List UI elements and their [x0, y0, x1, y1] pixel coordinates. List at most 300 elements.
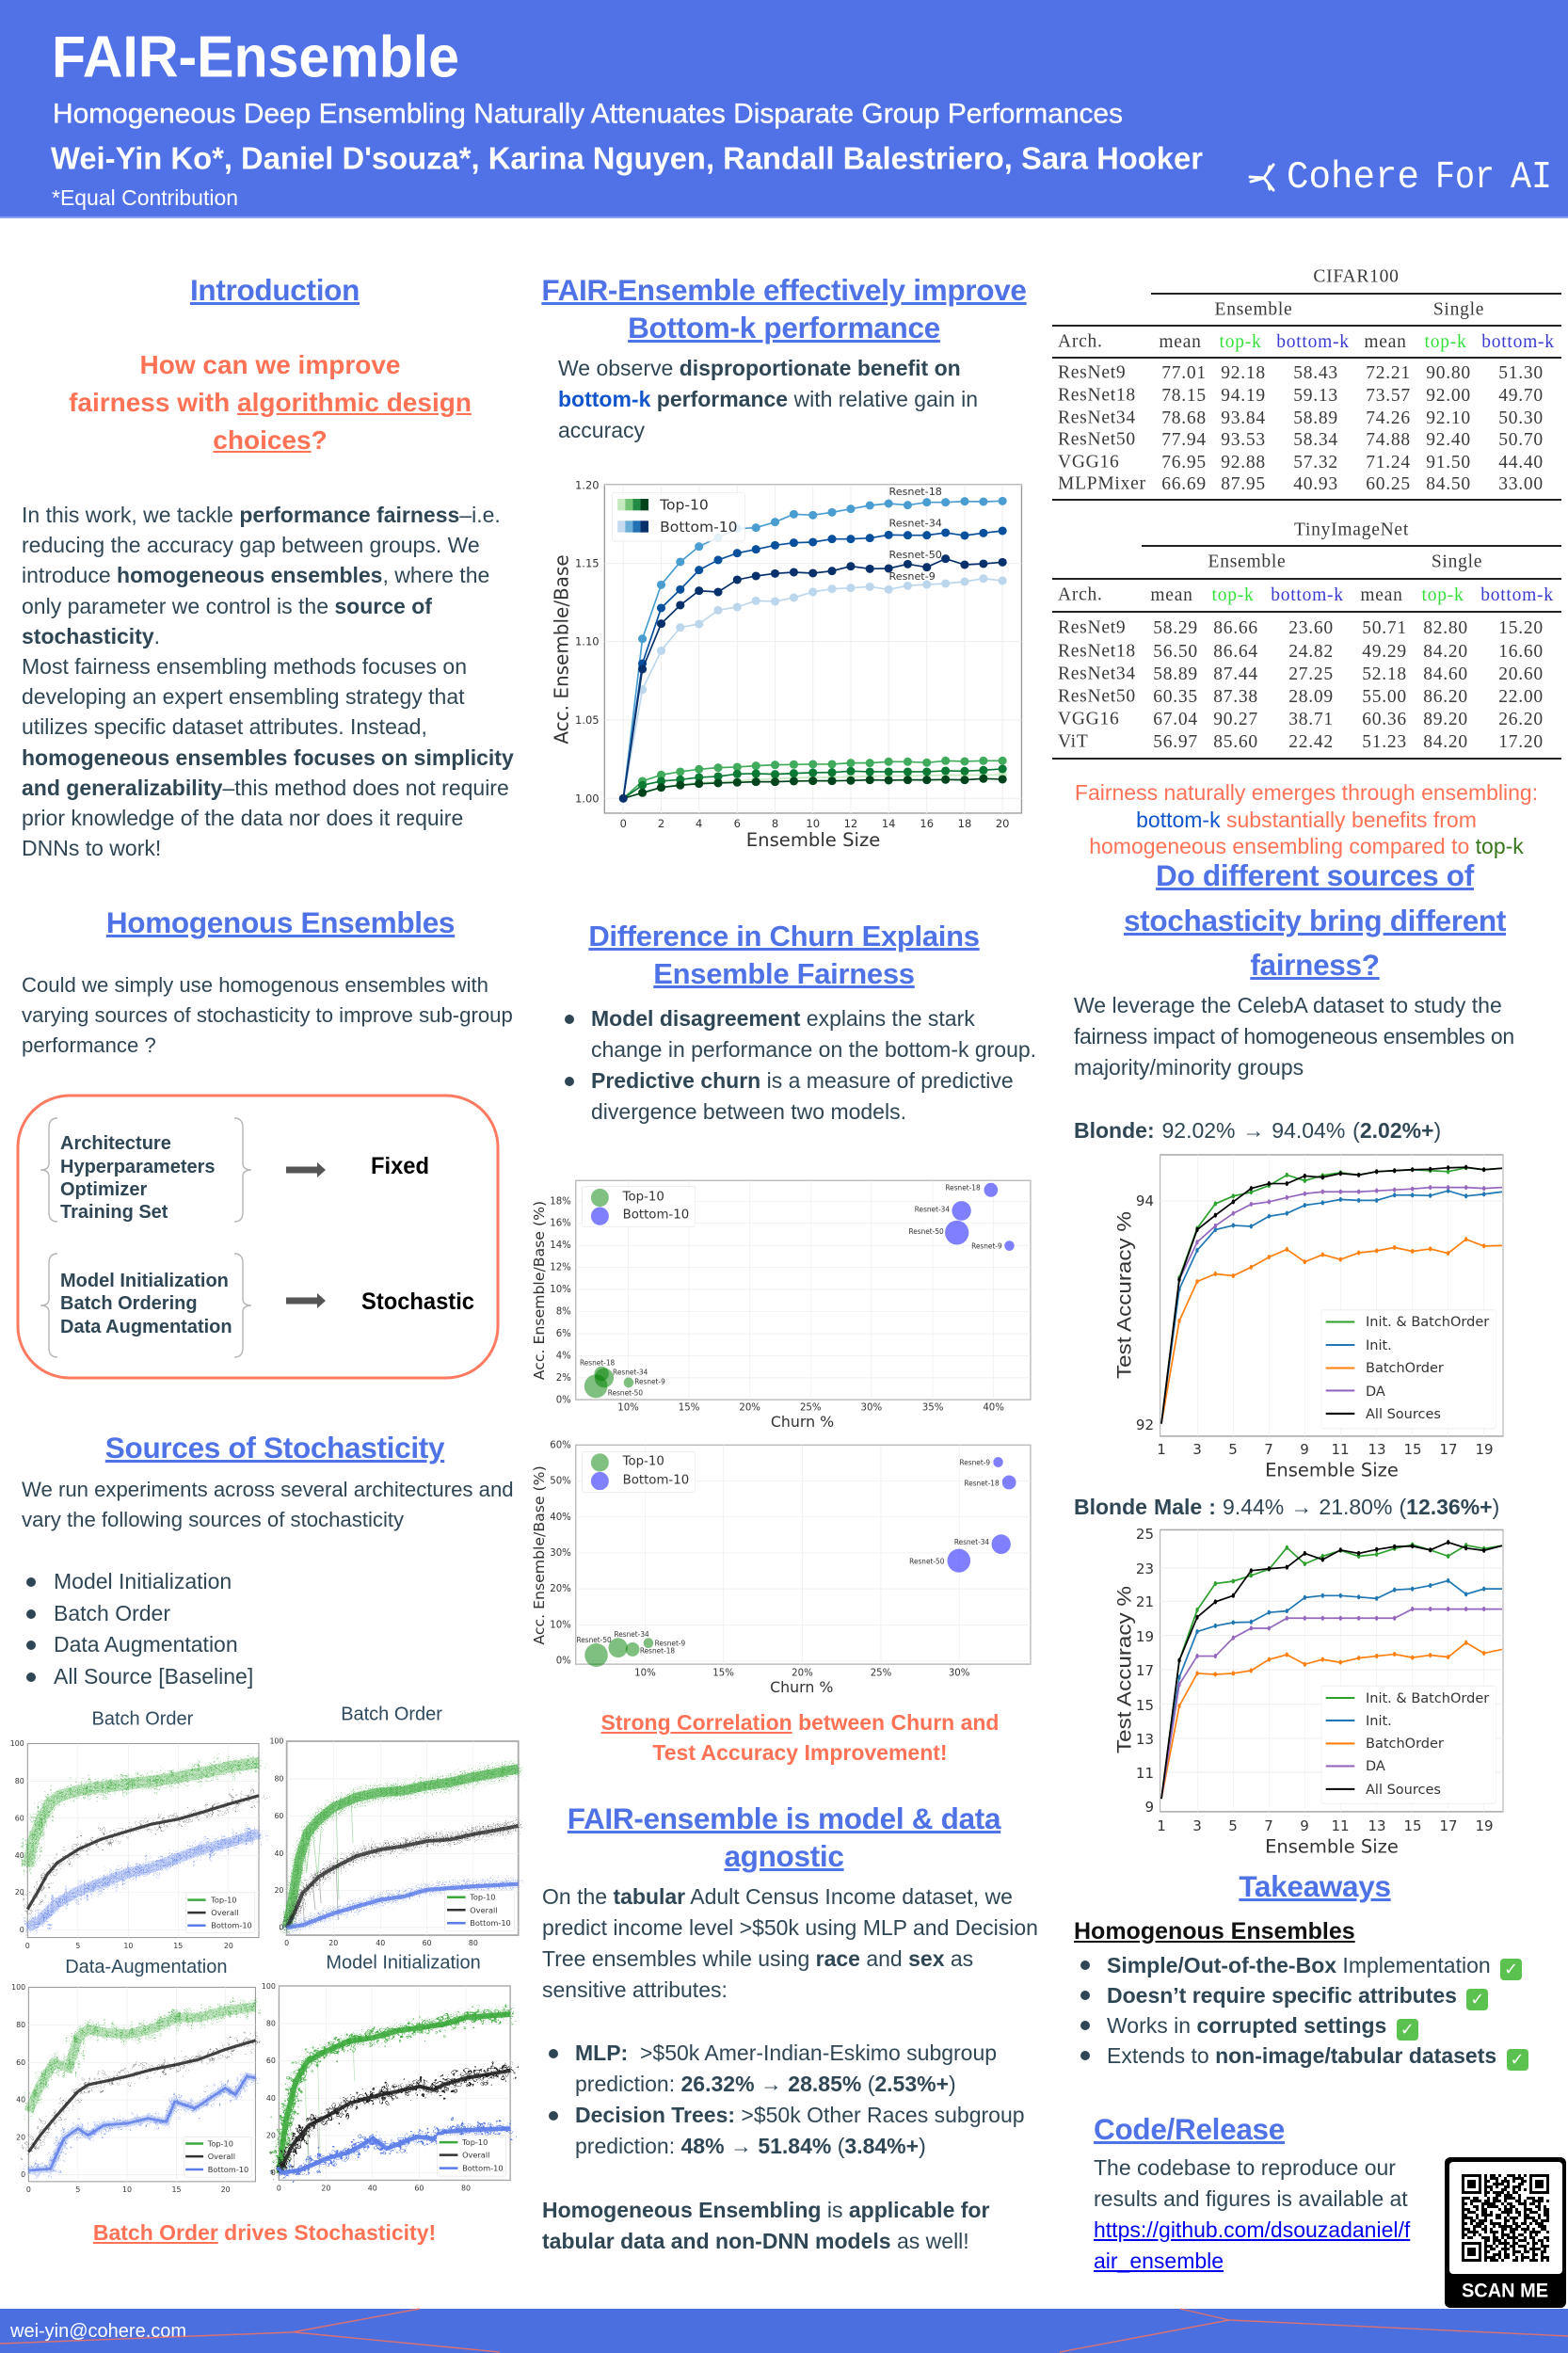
axis tick labels: 2 — [658, 817, 664, 830]
scatter plot: churn vs gain (cifar100): 8% — [556, 1305, 571, 1318]
introduction paragraph: homogeneous ensembles focuses on simplicity — [22, 745, 514, 770]
heading: sources of stochasticity: Sources of Stochasticity — [105, 1431, 444, 1465]
sources bullet list: Model Initialization — [54, 1569, 232, 1593]
table: tinyimagenet: 84.20 — [1423, 642, 1468, 661]
table: cifar100: ResNet50 — [1058, 429, 1136, 450]
poster title: FAIR-Ensemble — [52, 24, 459, 90]
fixed label: Fixed — [371, 1153, 429, 1179]
arrow to fixed — [286, 1162, 326, 1177]
table: cifar100: ResNet34 — [1058, 408, 1136, 427]
table: cifar100: ResNet9 — [1058, 363, 1126, 382]
scatter plot: churn vs gain (tinyimagenet): 10% — [634, 1667, 656, 1678]
axis tick labels: 6 — [734, 817, 741, 830]
series labels: Resnet-18 — [889, 486, 942, 498]
chart: model initialization: 0 — [271, 2169, 276, 2177]
table: cifar100: 66.69 — [1161, 474, 1207, 493]
table: tinyimagenet: 50.71 — [1362, 617, 1407, 638]
table: cifar100: 49.70 — [1498, 386, 1544, 405]
introduction paragraph: introduce homogeneous ensembles, where the — [22, 563, 489, 587]
legend: Bottom-10 — [462, 2164, 504, 2173]
scatter plot: churn vs gain (tinyimagenet): Acc. Ensemble/Base (%) — [531, 1465, 548, 1645]
table: tinyimagenet: 22.00 — [1498, 687, 1544, 706]
axis tick labels: 1.00 — [575, 792, 600, 805]
table: cifar100: 72.21 — [1366, 363, 1411, 382]
scatter plot: churn vs gain (cifar100): Resnet-50 — [908, 1227, 944, 1236]
table: cifar100: 90.80 — [1426, 363, 1471, 382]
line chart: blonde male test accuracy: 19 — [1475, 1817, 1494, 1834]
table: cifar100: 92.18 — [1221, 363, 1266, 382]
table: cifar100: 77.01 — [1161, 363, 1207, 382]
table: tinyimagenet: 60.36 — [1362, 710, 1407, 728]
takeaways subheading: Homogenous Ensembles — [1074, 1918, 1355, 1945]
homogenous ensembles paragraph: varying sources of stochasticity to improve sub-group — [22, 1003, 513, 1027]
introduction paragraph: and generalizability–this method does not require — [22, 776, 509, 800]
tabular results bullets: Decision Trees: >$50k Other Races subgroup — [575, 2103, 1025, 2127]
tabular results bullets: prediction: 48% → 51.84% (3.84%+) — [575, 2134, 926, 2158]
line chart: blonde male test accuracy: 5 — [1228, 1817, 1238, 1834]
legend: Top-10 — [207, 2138, 233, 2148]
heading: model and data agnostic: FAIR-ensemble is model & data — [568, 1801, 1000, 1835]
legend — [437, 2136, 505, 2176]
table: cifar100: 58.89 — [1293, 408, 1338, 427]
takeaways bullet list: ✓ — [1510, 2050, 1525, 2070]
scatter plot: churn vs gain (cifar100): 0% — [556, 1394, 571, 1406]
brace group: stochastic factors — [40, 1254, 251, 1357]
legend: Top-10 — [469, 1893, 496, 1902]
introduction paragraph: developing an expert ensembling strategy that — [22, 684, 465, 709]
scatter plot: churn vs gain (tinyimagenet): Resnet-9 — [655, 1639, 685, 1648]
table: cifar100: CIFAR100 — [1313, 267, 1400, 286]
chart: batch order (right): 80 — [274, 1774, 283, 1783]
line chart: blonde test accuracy: Init. & BatchOrder — [1366, 1315, 1489, 1330]
table: cifar100: 74.26 — [1366, 408, 1411, 427]
table: tinyimagenet — [1052, 520, 1561, 759]
chart: model initialization: 40 — [368, 2184, 377, 2192]
scatter plot: churn vs gain (cifar100): Resnet-34 — [915, 1205, 950, 1214]
line chart: blonde test accuracy: 1 — [1157, 1441, 1166, 1458]
line chart: blonde male test accuracy: 13 — [1368, 1817, 1386, 1834]
sources paragraph: vary the following sources of stochasticity — [22, 1508, 404, 1531]
scatter plot: churn vs gain (tinyimagenet): 20% — [792, 1667, 813, 1678]
heading: sources bring different fairness: Do different sources of — [1156, 858, 1474, 892]
scatter plot: churn vs gain (cifar100): 12% — [550, 1261, 571, 1273]
table: tinyimagenet: 58.29 — [1153, 617, 1198, 638]
celeba paragraph: fairness impact of homogeneous ensembles on — [1074, 1024, 1514, 1048]
brace group: fixed factors — [40, 1118, 251, 1222]
line chart: blonde male test accuracy: Ensemble Size — [1265, 1835, 1399, 1858]
line chart: blonde test accuracy: Ensemble Size — [1265, 1459, 1399, 1481]
heading: difference in churn: Ensemble Fairness — [653, 957, 915, 990]
chart: model initialization: 80 — [266, 2019, 276, 2027]
legend: Bottom-10 — [470, 1918, 511, 1928]
scatter plot: churn vs gain (tinyimagenet): 50% — [550, 1475, 571, 1487]
axis tick labels: 10 — [806, 817, 820, 830]
line chart: blonde male test accuracy: 25 — [1136, 1526, 1154, 1543]
line chart: blonde male test accuracy: 9 — [1300, 1817, 1309, 1834]
scatter plot: churn vs gain (tinyimagenet): 40% — [550, 1512, 571, 1523]
scatter plot: churn vs gain (cifar100): Resnet-18 — [945, 1183, 981, 1192]
bottom-k paragraph — [558, 356, 978, 442]
table: cifar100: 91.50 — [1426, 452, 1471, 472]
line chart: blonde test accuracy: All Sources — [1366, 1407, 1441, 1422]
legend: Overall — [208, 2152, 235, 2161]
heading: code release: Code/Release — [1094, 2112, 1285, 2146]
table: tinyimagenet: ViT — [1058, 732, 1088, 751]
cohere for ai wordmark: Cohere — [1287, 156, 1419, 200]
chart: batch order (right): 20 — [274, 1886, 283, 1895]
line chart: blonde male test accuracy: Init. — [1366, 1714, 1392, 1729]
table: tinyimagenet: 26.20 — [1498, 710, 1544, 728]
table: cifar100: 59.13 — [1293, 386, 1338, 405]
cohere for ai wordmark — [1287, 156, 1552, 200]
line chart: blonde male test accuracy: 13 — [1136, 1731, 1154, 1748]
celeba paragraph: majority/minority groups — [1074, 1055, 1304, 1080]
chart: batch order (left): 60 — [15, 1814, 24, 1822]
chart: data augmentation: 0 — [26, 2185, 31, 2194]
table: tinyimagenet: 51.23 — [1362, 732, 1407, 751]
homogenous ensembles paragraph: performance ? — [22, 1033, 156, 1057]
table: tinyimagenet: 84.60 — [1423, 664, 1468, 683]
table: cifar100: 78.15 — [1161, 386, 1207, 405]
legend — [582, 1451, 696, 1492]
chart: batch order (right): Batch Order — [341, 1704, 442, 1724]
chart: model initialization: 60 — [266, 2057, 276, 2065]
line chart: blonde male test accuracy: 15 — [1136, 1697, 1154, 1714]
table: tinyimagenet: 56.50 — [1153, 642, 1198, 661]
scatter plot: churn vs gain (cifar100): 20% — [739, 1401, 760, 1413]
chart: batch order (left): 10 — [123, 1942, 133, 1950]
line chart: blonde male test accuracy: BatchOrder — [1366, 1737, 1444, 1752]
scatter plot: churn vs gain (cifar100): Churn % — [771, 1413, 834, 1431]
legend: Bottom-10 — [660, 519, 738, 536]
churn bullet list: Model disagreement explains the stark — [591, 1006, 975, 1031]
table: cifar100: 92.00 — [1426, 386, 1471, 405]
chart: batch order (right): 100 — [269, 1737, 283, 1745]
scatter plot: churn vs gain (cifar100): 18% — [550, 1195, 571, 1207]
chart: data augmentation: 40 — [16, 2096, 25, 2105]
line chart: blonde test accuracy: 7 — [1264, 1441, 1273, 1458]
axis titles: Ensemble Size — [746, 829, 880, 851]
scatter plot: churn vs gain (cifar100): 25% — [800, 1401, 822, 1413]
chart: batch order (left): 15 — [173, 1942, 183, 1950]
stochastic factors list: Batch Ordering — [60, 1293, 198, 1314]
heading: difference in churn: Difference in Churn Explains — [588, 920, 980, 952]
table: cifar100: 84.50 — [1426, 474, 1471, 493]
scatter plot: churn vs gain (tinyimagenet): 15% — [712, 1667, 734, 1678]
scatter plot: churn vs gain (tinyimagenet): 25% — [871, 1667, 892, 1678]
scatter plot: churn vs gain (cifar100): 40% — [983, 1401, 1004, 1413]
legend: Top-10 — [461, 2137, 488, 2147]
scatter plot: churn vs gain (cifar100): 4% — [556, 1350, 571, 1361]
table: tinyimagenet: 58.89 — [1153, 664, 1198, 683]
table: tinyimagenet: 84.20 — [1423, 732, 1468, 751]
chart: data augmentation: 10 — [122, 2185, 132, 2194]
line chart: blonde test accuracy: 94 — [1136, 1193, 1154, 1209]
table: cifar100: MLPMixer — [1058, 474, 1146, 493]
series labels: Resnet-9 — [889, 570, 936, 583]
fairness caption under tables: homogeneous ensembling compared to top-k — [1089, 834, 1524, 858]
stochasticity diagram panel — [18, 1096, 498, 1378]
table: cifar100: top-k — [1220, 331, 1261, 352]
table: cifar100: bottom-k — [1481, 331, 1555, 352]
caption: batch order drives stochasticity: Batch Order drives Stochasticity! — [93, 2220, 436, 2245]
legend — [582, 1186, 696, 1226]
sources paragraph: We run experiments across several architectures and — [22, 1478, 514, 1501]
takeaways bullet list: Works in corrupted settings — [1107, 2013, 1386, 2038]
introduction paragraph: utilizes specific dataset attributes. Instead, — [22, 714, 427, 739]
line chart: blonde male test accuracy: 7 — [1264, 1817, 1273, 1834]
chart: batch order (left) — [10, 1708, 259, 1950]
scatter plot: churn vs gain (tinyimagenet): Resnet-9 — [960, 1458, 990, 1466]
table: tinyimagenet: 85.60 — [1213, 732, 1258, 751]
chart: batch order (left): 40 — [15, 1851, 24, 1860]
introduction paragraph: reducing the accuracy gap between groups. We — [22, 533, 480, 557]
arrow to stochastic — [286, 1293, 326, 1308]
scatter plot: churn vs gain (tinyimagenet): 30% — [550, 1547, 571, 1559]
fairness caption under tables — [1005, 779, 1568, 860]
research question callout: fairness with algorithmic design — [69, 388, 472, 417]
introduction paragraph: prior knowledge of the data nor does it require — [22, 806, 463, 830]
small training charts — [10, 1704, 519, 2194]
heading: sources bring different fairness: fairness? — [1250, 948, 1380, 982]
tabular results bullets: MLP: >$50k Amer-Indian-Eskimo subgroup — [575, 2041, 997, 2065]
line chart: blonde male test accuracy: Init. & BatchOrder — [1366, 1691, 1489, 1706]
table: tinyimagenet: VGG16 — [1058, 710, 1120, 728]
chart: model initialization: 80 — [461, 2184, 471, 2192]
sources bullet list: Batch Order — [54, 1601, 170, 1625]
line chart: blonde male test accuracy: DA — [1366, 1759, 1385, 1774]
churn bullet list — [565, 1006, 1036, 1124]
bottom-k paragraph: bottom-k performance with relative gain in — [558, 387, 978, 411]
code release paragraph — [1094, 2153, 1410, 2277]
legend: Overall — [462, 2151, 489, 2160]
line chart: blonde test accuracy: 15 — [1403, 1441, 1422, 1458]
scatter plot: churn vs gain (tinyimagenet): Resnet-18 — [964, 1479, 1000, 1488]
scatter plot: churn vs gain (tinyimagenet): Resnet-50 — [909, 1558, 945, 1566]
legend: Overall — [470, 1905, 498, 1914]
chart: batch order (right): 40 — [274, 1849, 283, 1858]
table: tinyimagenet: 56.97 — [1153, 732, 1198, 751]
chart: batch order (left): Batch Order — [92, 1708, 194, 1729]
chart: model initialization: 20 — [321, 2184, 330, 2192]
scatter plot: churn vs gain (cifar100): 16% — [550, 1218, 571, 1229]
scatter plot: churn vs gain (tinyimagenet): 0% — [556, 1656, 571, 1667]
line chart: blonde male test accuracy: 11 — [1331, 1817, 1350, 1834]
heading: model and data agnostic: agnostic — [724, 1839, 844, 1873]
line chart: blonde male test accuracy: 17 — [1439, 1817, 1458, 1834]
axis tick labels: 14 — [882, 817, 895, 830]
line chart: blonde male test accuracy: 9 — [1144, 1799, 1154, 1816]
heading: model and data agnostic — [567, 1801, 1001, 1873]
axis tick labels: 18 — [958, 817, 971, 830]
chart: model initialization: Model Initialization — [326, 1953, 481, 1974]
table: cifar100: 60.25 — [1366, 474, 1411, 493]
scatter plot: churn vs gain (tinyimagenet): Resnet-34 — [614, 1630, 649, 1639]
celeba paragraph: We leverage the CelebA dataset to study the — [1074, 993, 1502, 1017]
chart: batch order (right): 40 — [376, 1939, 385, 1947]
tabular conclusion: tabular data and non-DNN models as well! — [542, 2229, 969, 2253]
line chart: blonde test accuracy: 17 — [1439, 1441, 1458, 1458]
legend box — [1321, 1310, 1496, 1429]
introduction paragraph: only parameter we control is the source of — [22, 594, 432, 618]
chart: data augmentation: 60 — [16, 2058, 25, 2067]
chart: batch order (left): 100 — [10, 1739, 24, 1748]
sources bullet list: All Source [Baseline] — [54, 1664, 253, 1689]
chart: data augmentation: 100 — [11, 1983, 25, 1992]
blonde male result label: Blonde Male : 9.44% → 21.80% (12.36%+) — [1074, 1495, 1499, 1519]
research question callout: choices? — [213, 425, 328, 455]
axis tick labels: 16 — [920, 817, 934, 830]
table: cifar100: 44.40 — [1498, 452, 1544, 472]
table: cifar100: 33.00 — [1498, 474, 1544, 493]
series labels: Resnet-50 — [889, 549, 942, 561]
tabular conclusion — [542, 2195, 989, 2257]
table: tinyimagenet: 17.20 — [1498, 732, 1544, 751]
tabular results bullets: prediction: 26.32% → 28.85% (2.53%+) — [575, 2072, 956, 2096]
heading: sources bring different fairness — [1014, 854, 1568, 988]
table: tinyimagenet: 89.20 — [1423, 710, 1468, 728]
chart: data augmentation: Data-Augmentation — [65, 1957, 227, 1977]
line chart: blonde male test accuracy: 23 — [1136, 1561, 1154, 1577]
introduction paragraph: In this work, we tackle performance fairness–i.e. — [22, 503, 501, 527]
tabular conclusion: Homogeneous Ensembling is applicable for — [542, 2198, 989, 2222]
icon: cohere logo — [1250, 165, 1273, 190]
scatter plot: churn vs gain (cifar100): 10% — [550, 1284, 571, 1295]
table: cifar100: 58.34 — [1293, 429, 1338, 450]
scatter plot: churn vs gain (cifar100): Resnet-18 — [580, 1359, 615, 1368]
table: cifar100: 94.19 — [1221, 386, 1266, 405]
line chart: blonde test accuracy: Init. — [1366, 1338, 1392, 1353]
line chart: blonde male test accuracy: 15 — [1403, 1817, 1422, 1834]
scatter plot: churn vs gain (cifar100): 10% — [617, 1401, 639, 1413]
table: cifar100: top-k — [1425, 331, 1466, 352]
chart: model initialization: 0 — [277, 2184, 281, 2192]
chart: batch order (right): 60 — [274, 1812, 283, 1820]
table: cifar100: Ensemble — [1215, 299, 1292, 320]
stochastic factors list: Data Augmentation — [60, 1317, 232, 1337]
tabular paragraph — [542, 1881, 1038, 2006]
chart: model initialization: 60 — [414, 2184, 424, 2192]
chart: model initialization — [262, 1953, 510, 2192]
line chart: blonde test accuracy: Test Accuracy % — [1114, 1211, 1135, 1379]
line chart: blonde male test accuracy: 11 — [1136, 1765, 1154, 1782]
axis tick labels: 0 — [620, 817, 627, 830]
table: tinyimagenet: ResNet34 — [1058, 664, 1136, 683]
legend: Bottom-10 — [623, 1208, 689, 1223]
axis tick labels: 1.10 — [575, 635, 600, 648]
takeaways bullet list: ✓ — [1400, 2020, 1415, 2040]
legend: Bottom-10 — [211, 1921, 252, 1930]
axis tick labels: 4 — [696, 817, 702, 830]
chart: data augmentation: 20 — [221, 2185, 231, 2194]
chart: batch order (right): 0 — [284, 1939, 289, 1947]
middle column heading: bottom-k performance — [541, 273, 1027, 344]
line chart: blonde test accuracy: BatchOrder — [1366, 1361, 1444, 1376]
takeaways bullet list: ✓ — [1470, 1990, 1484, 2009]
line chart: blonde male test accuracy: All Sources — [1366, 1783, 1441, 1798]
table: tinyimagenet: 52.18 — [1362, 664, 1407, 683]
fixed factors list: Architecture — [60, 1133, 171, 1154]
takeaways bullet list — [1107, 1950, 1528, 2071]
introduction paragraph: Most fairness ensembling methods focuses on — [22, 654, 467, 679]
top-10 series — [623, 760, 1002, 798]
table: tinyimagenet: Single — [1432, 552, 1482, 572]
chart: batch order (left): 0 — [20, 1926, 24, 1934]
line chart: blonde male test accuracy: 19 — [1136, 1628, 1154, 1645]
chart: batch order (right): 0 — [279, 1923, 283, 1931]
sources bullet list — [26, 1569, 253, 1689]
table: cifar100: Single — [1433, 299, 1484, 320]
sources bullet list: Data Augmentation — [54, 1632, 238, 1657]
table: tinyimagenet: 24.82 — [1288, 642, 1334, 661]
table: tinyimagenet: 38.71 — [1288, 710, 1334, 728]
line chart: blonde male test accuracy: 1 — [1157, 1817, 1166, 1834]
chart: batch order (left): 80 — [15, 1777, 24, 1785]
table: tinyimagenet: mean — [1360, 585, 1403, 604]
axis tick labels: 1.05 — [575, 713, 600, 727]
stochastic factors list: Model Initialization — [60, 1271, 229, 1291]
footer email: wei-yin@cohere.com — [10, 2321, 186, 2342]
table: tinyimagenet: 16.60 — [1498, 642, 1544, 661]
table: tinyimagenet: TinyImageNet — [1294, 520, 1409, 540]
table: cifar100: ResNet18 — [1058, 386, 1136, 405]
middle column heading: bottom-k performance: FAIR-Ensemble effectively improve — [541, 273, 1027, 307]
line chart: blonde male test accuracy — [1114, 1526, 1503, 1858]
table: cifar100: 87.95 — [1221, 474, 1266, 493]
line chart: blonde test accuracy: 13 — [1368, 1441, 1386, 1458]
heading: takeaways: Takeaways — [1239, 1869, 1391, 1903]
table: cifar100: mean — [1364, 331, 1407, 352]
legend — [185, 1893, 255, 1933]
legend box — [1321, 1686, 1496, 1803]
heading: sources bring different fairness: stochasticity bring different — [1124, 904, 1506, 937]
table: cifar100: 76.95 — [1161, 452, 1207, 472]
table: cifar100: 50.30 — [1498, 408, 1544, 427]
scatter plot: churn vs gain (cifar100): Resnet-34 — [613, 1368, 648, 1376]
table: tinyimagenet: 23.60 — [1288, 617, 1334, 638]
table: tinyimagenet: top-k — [1422, 585, 1464, 604]
chart: batch order (left): 20 — [224, 1942, 233, 1950]
axis tick labels: 1.20 — [575, 479, 600, 492]
table: tinyimagenet: top-k — [1212, 585, 1254, 604]
bubbles — [945, 1183, 1015, 1251]
table: cifar100: 93.84 — [1221, 408, 1266, 427]
table: tinyimagenet: 86.66 — [1213, 617, 1258, 638]
table: tinyimagenet: 28.09 — [1288, 687, 1334, 706]
code release paragraph: The codebase to reproduce our — [1094, 2155, 1396, 2180]
cohere for ai wordmark: AI — [1511, 156, 1552, 200]
heading: difference in churn — [588, 920, 980, 990]
table: cifar100: Arch. — [1058, 331, 1103, 352]
table: cifar100: 93.53 — [1221, 429, 1266, 450]
table: cifar100 — [1052, 267, 1561, 500]
table: cifar100: 92.40 — [1426, 429, 1471, 450]
table: cifar100: 73.57 — [1366, 386, 1411, 405]
chart: data augmentation: 0 — [21, 2170, 25, 2179]
line chart: blonde test accuracy: 19 — [1475, 1441, 1494, 1458]
table: tinyimagenet: 90.27 — [1213, 710, 1258, 728]
axis tick labels: 12 — [844, 817, 857, 830]
fixed factors list: Training Set — [60, 1202, 168, 1223]
table: tinyimagenet: 55.00 — [1362, 687, 1407, 706]
introduction paragraph: stochasticity. — [22, 624, 160, 648]
table: tinyimagenet: ResNet9 — [1058, 617, 1126, 638]
bottom-10 series — [623, 501, 1002, 798]
churn bullet list: change in performance on the bottom-k group. — [591, 1037, 1036, 1062]
research question callout: How can we improve — [140, 350, 400, 379]
sources paragraph — [22, 1478, 514, 1531]
footer band — [0, 2309, 1568, 2353]
